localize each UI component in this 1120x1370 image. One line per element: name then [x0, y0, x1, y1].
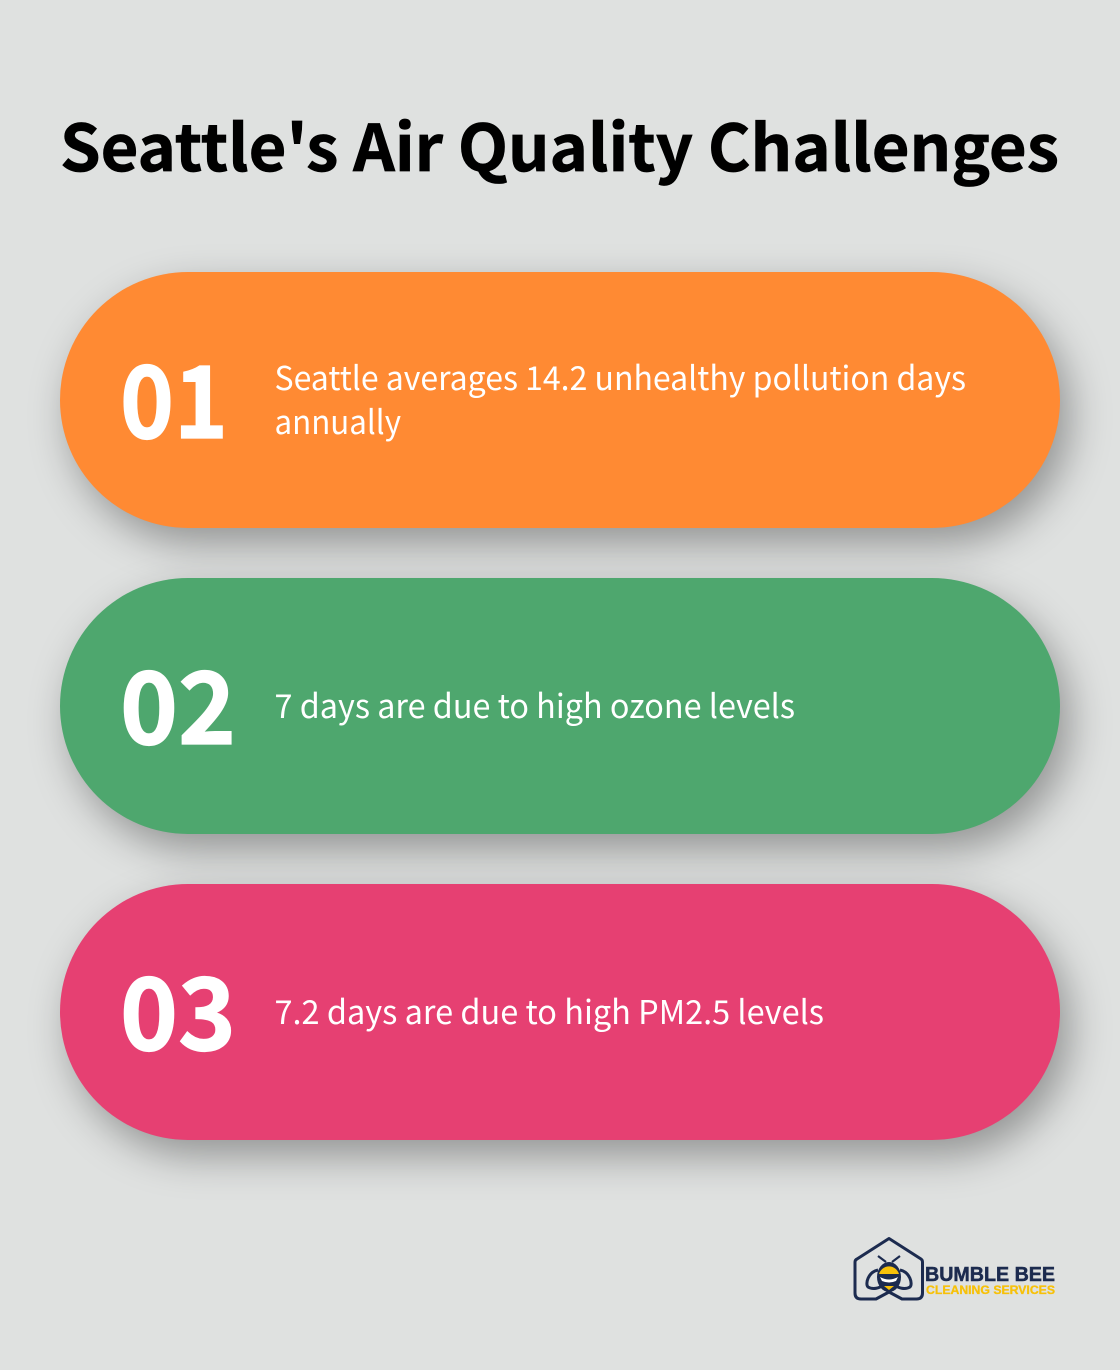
number 01 and text: Seattle averages 14.2 unhealthy pollution days [274, 352, 966, 400]
panel: card 02 [60, 578, 1060, 834]
number 01 and text [120, 322, 966, 467]
icon: house with bee [855, 1238, 922, 1299]
number 03 and text [120, 934, 824, 1079]
number 02 and text [120, 628, 795, 773]
panel: card 01 [60, 272, 1060, 528]
number 01 and text: annually [274, 396, 401, 444]
number 02 and text: 02 [120, 628, 236, 773]
logo wordmark: BUMBLE BEE [925, 1264, 1055, 1286]
number 03 and text: 03 [120, 934, 236, 1079]
title: Seattle's Air Quality Challenges [60, 98, 1059, 190]
number 01 and text: 01 [120, 322, 228, 467]
number 03 and text: 7.2 days are due to high PM2.5 levels [274, 986, 824, 1034]
number 02 and text: 7 days are due to high ozone levels [274, 680, 795, 728]
panel: card 03 [60, 884, 1060, 1140]
logo wordmark: CLEANING SERVICES [926, 1285, 1055, 1297]
logo wordmark [925, 1264, 1055, 1297]
